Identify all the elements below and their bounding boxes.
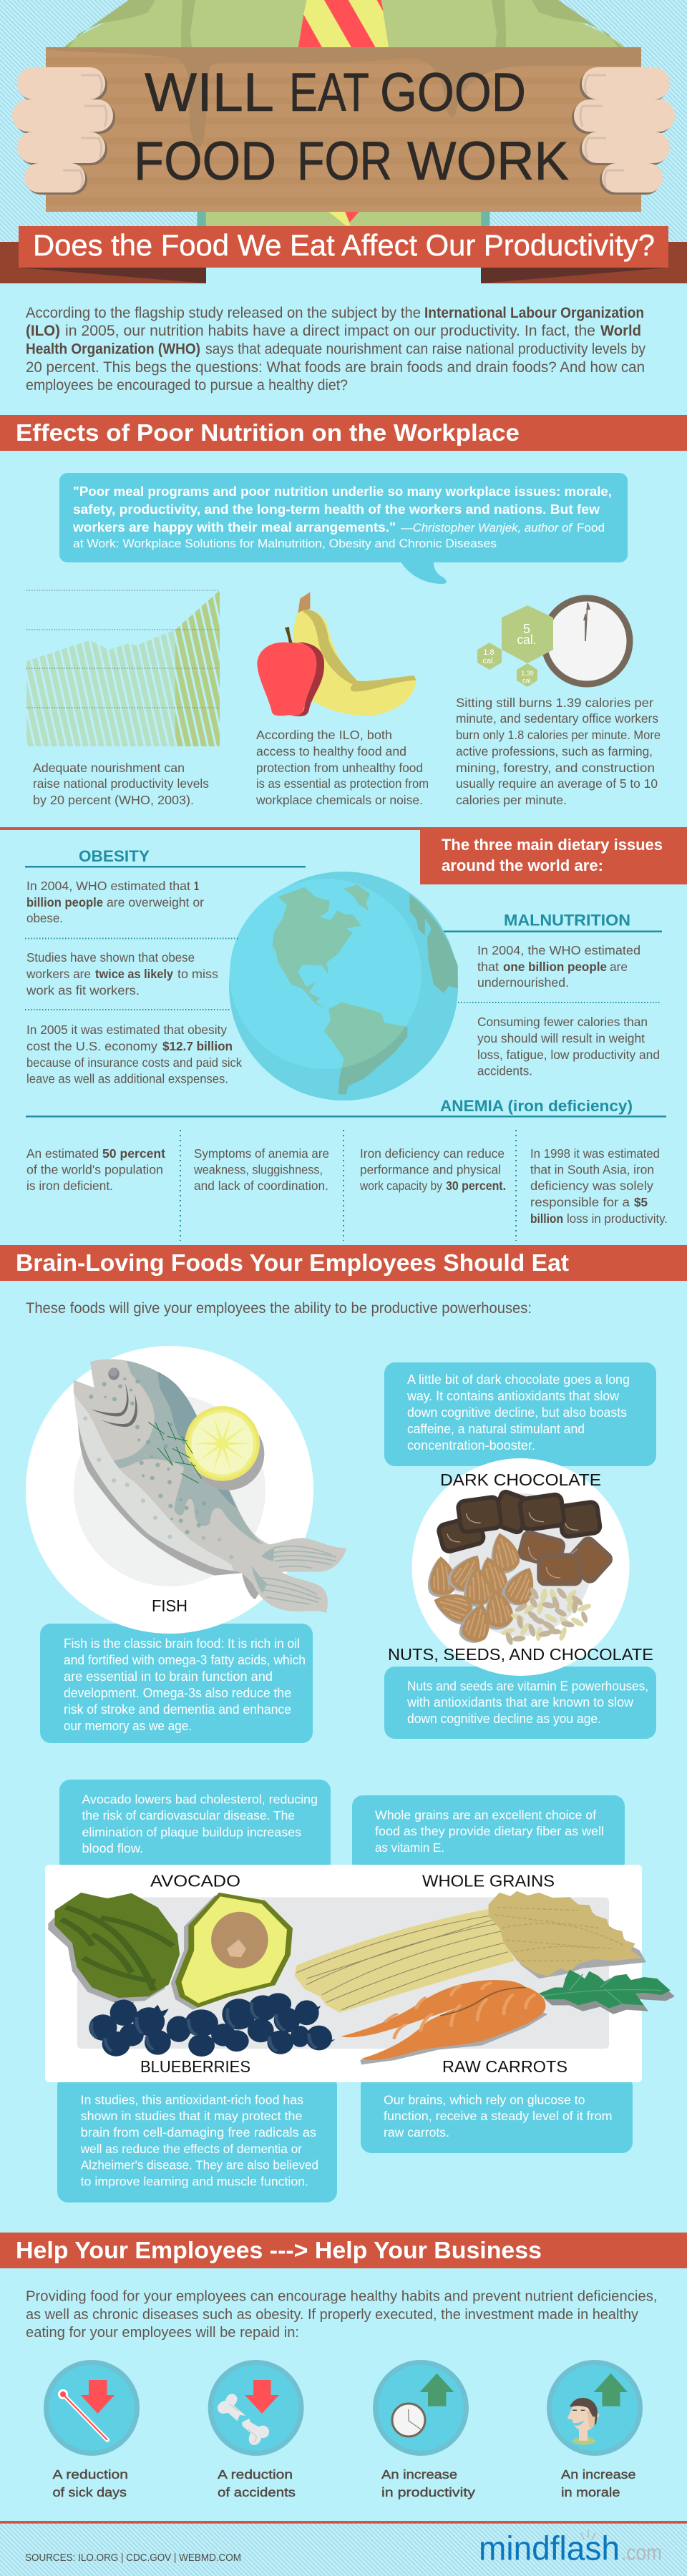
icon: clock with calorie hexagons: cal.	[517, 633, 537, 647]
panel: obesity: In 2004, WHO estimated that	[26, 879, 190, 893]
panel: dark chocolate description: down cognitive decline, but also boasts	[407, 1405, 627, 1420]
illustration: fish with lemon	[74, 1359, 346, 1613]
chart caption: Adequate nourishment can	[33, 761, 185, 775]
outcome labels: An increase	[561, 2467, 635, 2482]
wheat stalks	[294, 1909, 515, 2013]
illustration: worker torso and tie	[62, 0, 626, 230]
panel: obesity: 1	[194, 879, 199, 893]
clock caption: usually require an average of 5 to 10	[456, 776, 658, 791]
panel: obesity: $12.7 billion	[162, 1039, 233, 1053]
panel: obesity: billion people	[26, 895, 103, 909]
label: dark chocolate: DARK CHOCOLATE	[440, 1470, 601, 1489]
panel: malnutrition: MALNUTRITION	[504, 912, 630, 929]
panel: fish description: are essential in to brain function and	[64, 1669, 273, 1684]
panel: blueberries description: to improve learning and muscle function.	[81, 2174, 308, 2188]
panel: anemia: 30 percent.	[446, 1179, 506, 1193]
label: raw carrots: RAW CARROTS	[442, 2057, 567, 2076]
carrots	[341, 1970, 675, 2064]
panel: whole grains description: food as they provide dietary fiber as well	[375, 1824, 604, 1838]
icon: clock with calorie hexagons: cal.	[522, 677, 532, 684]
icon: smiling person, increased morale	[550, 2363, 640, 2453]
panel: malnutrition: Consuming fewer calories than	[477, 1015, 648, 1029]
panel: obesity: work as fit workers.	[26, 983, 140, 997]
quote speech bubble: Food	[577, 522, 605, 535]
apple and banana caption: is as essential as protection from	[256, 776, 429, 791]
panel: nuts description: down cognitive decline as you age.	[407, 1712, 601, 1726]
ribbon banner: Does the Food We Eat Affect Our Productivity?	[33, 228, 655, 262]
outcome labels: A reduction	[218, 2467, 293, 2482]
panel: malnutrition: loss, fatigue, low productivity and	[477, 1048, 660, 1062]
quote speech bubble: —Christopher Wanjek, author of	[400, 522, 573, 535]
panel: nuts description	[384, 1667, 656, 1739]
panel: raw carrots description: raw carrots.	[384, 2125, 449, 2140]
chart caption: by 20 percent (WHO, 2003).	[33, 793, 194, 807]
plate: chocolate and nuts	[412, 1458, 630, 1676]
icon: clock with calorie hexagons	[477, 598, 630, 687]
divider band with dietary issues callout	[0, 827, 687, 884]
quote speech bubble: at Work: Workplace Solutions for Malnutrition, Obesity and Chronic Diseases	[73, 537, 497, 550]
panel: blueberries description: In studies, this antioxidant-rich food has	[81, 2092, 303, 2107]
panel: malnutrition: you should will result in weight	[477, 1031, 645, 1045]
panel: whole grains description: as vitamin E.	[375, 1840, 444, 1855]
globe	[229, 872, 458, 1101]
panel: obesity: cost the U.S. economy	[26, 1039, 157, 1053]
panel: avocado description: blood flow.	[82, 1841, 143, 1855]
intro paragraph: According to the flagship study released on the subject by the	[26, 305, 421, 321]
closing paragraph	[26, 2289, 657, 2341]
intro paragraph: 20 percent. This begs the questions: What foods are brain foods and drain foods? And how can	[26, 359, 645, 376]
clock caption: calories per minute.	[456, 793, 567, 807]
hand: right	[572, 67, 675, 195]
section heading: help your employees	[0, 2233, 687, 2268]
panel: anemia: work capacity by	[359, 1179, 442, 1193]
intro paragraph: Health Organization (WHO)	[26, 341, 200, 358]
panel: anemia: An estimated	[26, 1146, 99, 1161]
clock caption: mining, forestry, and construction	[456, 761, 655, 775]
outcome labels	[53, 2467, 635, 2499]
section heading: effects of poor nutrition: Effects of Poor Nutrition on the Workplace	[16, 419, 520, 446]
chart caption	[33, 761, 209, 807]
panel: fish description: and fortified with omega-3 fatty acids, which	[64, 1653, 306, 1667]
outcome labels: in productivity	[381, 2485, 475, 2499]
illustration: avocado, blueberries, grains, carrots	[48, 1891, 675, 2064]
intro paragraph: in 2005, our nutrition habits have a direct impact on our productivity. In fact, the	[65, 323, 595, 339]
panel: anemia: weakness, sluggishness,	[193, 1163, 323, 1177]
panel: dark chocolate description: caffeine, a natural stimulant and	[407, 1422, 585, 1436]
panel: anemia: deficiency was solely	[530, 1179, 653, 1193]
panel: obesity: twice as likely	[95, 967, 173, 981]
footer with sources and logo	[0, 2521, 687, 2576]
title: FOOD	[134, 131, 276, 192]
apple and banana caption: According the ILO, both	[256, 728, 392, 742]
panel: obesity: are overweight or	[107, 895, 204, 909]
apple and banana caption: workplace chemicals or noise.	[255, 793, 423, 807]
title	[134, 62, 569, 192]
chart: productivity area	[26, 590, 220, 746]
panel: anemia: of the world's population	[26, 1163, 163, 1177]
panel: anemia: is iron deficient.	[26, 1179, 113, 1193]
clock caption: minute, and sedentary office workers	[456, 711, 658, 726]
section heading: effects of poor nutrition	[0, 415, 687, 451]
blueberries	[89, 1993, 335, 2057]
closing paragraph: as well as chronic diseases such as obesity. If properly executed, the investment made in healthy	[26, 2307, 638, 2323]
panel: raw carrots description: function, receive a steady level of it from	[384, 2109, 613, 2123]
foods intro text: These foods will give your employees the ability to be productive powerhouses:	[26, 1300, 532, 1317]
outcome labels: An increase	[381, 2467, 457, 2482]
footer with sources and logo: mindflash	[479, 2529, 620, 2567]
section heading: help your employees: Help Your Employees ---> Help Your Business	[16, 2237, 542, 2263]
panel: avocado description	[59, 1780, 331, 1873]
panel: blueberries description: shown in studies that it may protect the	[81, 2109, 302, 2123]
clock caption	[456, 696, 661, 807]
title: WORK	[407, 131, 569, 192]
panel: malnutrition	[444, 912, 662, 1078]
panel: anemia: that in South Asia, iron	[530, 1163, 654, 1177]
panel: avocado description: elimination of plaque buildup increases	[82, 1825, 301, 1839]
closing paragraph: Providing food for your employees can encourage healthy habits and prevent nutrient deficiencies,	[26, 2289, 657, 2305]
panel: obesity: workers are	[26, 967, 91, 981]
panel: obesity	[25, 847, 306, 1086]
plate: fish	[26, 1346, 313, 1634]
divider band with dietary issues callout: The three main dietary issues	[442, 836, 663, 854]
panel: anemia: and lack of coordination.	[194, 1179, 328, 1193]
intro paragraph: World	[600, 323, 641, 339]
icon: clock with calorie hexagons: 1.8	[483, 648, 494, 657]
panel: obesity: because of insurance costs and paid sick	[26, 1055, 242, 1070]
panel: fish description: our memory as we age.	[64, 1719, 192, 1733]
icon: broken bone, fewer accidents	[210, 2363, 301, 2453]
quote speech bubble	[59, 473, 628, 584]
panel: blueberries description: well as reduce the effects of dementia or	[80, 2142, 302, 2156]
outcome labels: in morale	[561, 2485, 620, 2499]
panel: obesity: to miss	[177, 967, 218, 981]
panel: anemia: Iron deficiency can reduce	[360, 1146, 505, 1161]
panel: anemia: In 1998 it was estimated	[530, 1146, 660, 1161]
apple and banana caption: access to healthy food and	[256, 744, 406, 758]
panel: nuts description: Nuts and seeds are vitamin E powerhouses,	[407, 1679, 648, 1693]
label: avocado: AVOCADO	[150, 1872, 240, 1890]
icon: clock with calorie hexagons: 1.39	[521, 670, 534, 677]
panel: obesity: Studies have shown that obese	[26, 950, 195, 965]
wheat heads	[489, 1891, 646, 1979]
panel: whole grains description: Whole grains are an excellent choice of	[375, 1807, 596, 1822]
panel: dark chocolate description: A little bit of dark chocolate goes a long	[407, 1372, 630, 1387]
panel: avocado description: Avocado lowers bad cholesterol, reducing	[82, 1792, 318, 1806]
divider band with dietary issues callout: around the world are:	[442, 857, 603, 874]
icon: thermometer, fewer sick days	[46, 2363, 137, 2453]
panel: anemia: 50 percent	[102, 1146, 165, 1161]
panel: anemia: Symptoms of anemia are	[194, 1146, 329, 1161]
label: whole grains: WHOLE GRAINS	[422, 1872, 555, 1890]
panel: raw carrots description: Our brains, which rely on glucose to	[384, 2092, 585, 2107]
panel: anemia: responsible for a	[530, 1195, 630, 1209]
title: FOR	[297, 131, 392, 192]
outcome labels: of accidents	[218, 2485, 296, 2499]
panel: avocado description: the risk of cardiovascular disease. The	[82, 1808, 295, 1823]
apple and banana caption	[255, 728, 429, 807]
panel: fish description: Fish is the classic brain food: It is rich in oil	[64, 1636, 300, 1651]
closing paragraph: eating for your employees will be repaid in:	[26, 2325, 299, 2341]
ribbon banner	[0, 226, 687, 283]
panel: obesity: In 2005 it was estimated that obesity	[26, 1023, 227, 1037]
panel: blueberries description: brain from cell-damaging free radicals as	[81, 2125, 316, 2140]
intro paragraph: says that adequate nourishment can raise national productivity levels by	[205, 341, 645, 358]
whole avocado	[48, 1893, 180, 2002]
panel: obesity: obese.	[26, 911, 63, 925]
label: fish: FISH	[152, 1596, 187, 1615]
quote speech bubble: "Poor meal programs and poor nutrition underlie so many workplace issues: morale,	[73, 484, 612, 499]
clock caption: burn only 1.8 calories per minute. More	[456, 728, 661, 742]
header hatched backdrop	[0, 0, 687, 243]
clock caption: active professions, such as farming,	[456, 744, 653, 758]
footer with sources and logo: SOURCES: ILO.ORG | CDC.GOV | WEBMD.COM	[25, 2552, 241, 2564]
outcome labels: of sick days	[53, 2485, 127, 2499]
illustration: chocolate, almonds, seeds	[425, 1491, 613, 1646]
section heading: brain-loving foods: Brain-Loving Foods Your Employees Should Eat	[16, 1249, 569, 1276]
panel: obesity: leave as well as additional exspenses.	[26, 1072, 228, 1086]
section heading: brain-loving foods	[0, 1245, 687, 1281]
apple and banana caption: protection from unhealthy food	[256, 761, 423, 775]
icon: clock, increased productivity	[375, 2363, 467, 2453]
panel: anemia: billion	[530, 1211, 563, 1226]
panel: malnutrition: are	[610, 960, 628, 974]
label: nuts, seeds and chocolate: NUTS, SEEDS, AND CHOCOLATE	[388, 1645, 653, 1664]
panel: malnutrition: undernourished.	[477, 975, 569, 990]
panel: fish description	[40, 1624, 313, 1743]
hand: left	[12, 67, 115, 195]
title: WILL	[145, 62, 274, 123]
panel: malnutrition: accidents.	[477, 1063, 532, 1078]
panel: malnutrition: one billion people	[503, 960, 607, 974]
panel: anemia: performance and physical	[360, 1163, 501, 1177]
panel: blueberries description	[57, 2075, 337, 2202]
chart caption: raise national productivity levels	[33, 776, 209, 791]
clock caption: Sitting still burns 1.39 calories per	[456, 696, 653, 710]
white food panel	[45, 1865, 642, 2082]
panel: malnutrition: that	[477, 960, 499, 974]
label: blueberries: BLUEBERRIES	[140, 2057, 250, 2076]
icon: apple and banana	[257, 592, 416, 716]
panel: anemia: loss in productivity.	[567, 1211, 668, 1226]
panel: anemia: ANEMIA (iron deficiency)	[440, 1097, 633, 1115]
cut avocado	[171, 1893, 293, 2010]
quote speech bubble: workers are happy with their meal arrangements."	[72, 519, 396, 535]
panel: anemia: $5	[634, 1195, 648, 1209]
panel: fish description: risk of stroke and dementia and enhance	[64, 1702, 291, 1717]
cardboard sign	[46, 47, 641, 212]
outcome labels: A reduction	[53, 2467, 128, 2482]
panel: whole grains description	[352, 1795, 625, 1873]
intro paragraph: (ILO)	[26, 323, 60, 339]
footer with sources and logo: .com	[621, 2540, 662, 2565]
panel: obesity: OBESITY	[79, 847, 150, 865]
intro paragraph	[26, 305, 645, 394]
panel: anemia	[26, 1097, 668, 1241]
icon: clock with calorie hexagons: 5	[523, 622, 530, 636]
panel: malnutrition: In 2004, the WHO estimated	[477, 943, 640, 957]
title: GOOD	[380, 62, 526, 123]
intro paragraph: employees be encouraged to pursue a healthy diet?	[26, 377, 348, 394]
panel: nuts description: with antioxidants that are known to slow	[406, 1695, 634, 1709]
panel: raw carrots description	[361, 2075, 633, 2153]
panel: dark chocolate description	[384, 1362, 656, 1466]
panel: fish description: development. Omega-3s also reduce the	[64, 1686, 291, 1700]
icon: clock with calorie hexagons: cal.	[482, 657, 495, 665]
title: EAT	[289, 62, 369, 123]
panel: dark chocolate description: concentration-booster.	[407, 1438, 535, 1453]
panel: dark chocolate description: way. It contains antioxidants that slow	[406, 1389, 620, 1403]
panel: blueberries description: Alzheimer's disease. They are also believed	[81, 2158, 318, 2172]
quote speech bubble: safety, productivity, and the long-term health of the workers and nations. But few	[73, 502, 600, 517]
intro paragraph: International Labour Organization	[424, 305, 644, 321]
